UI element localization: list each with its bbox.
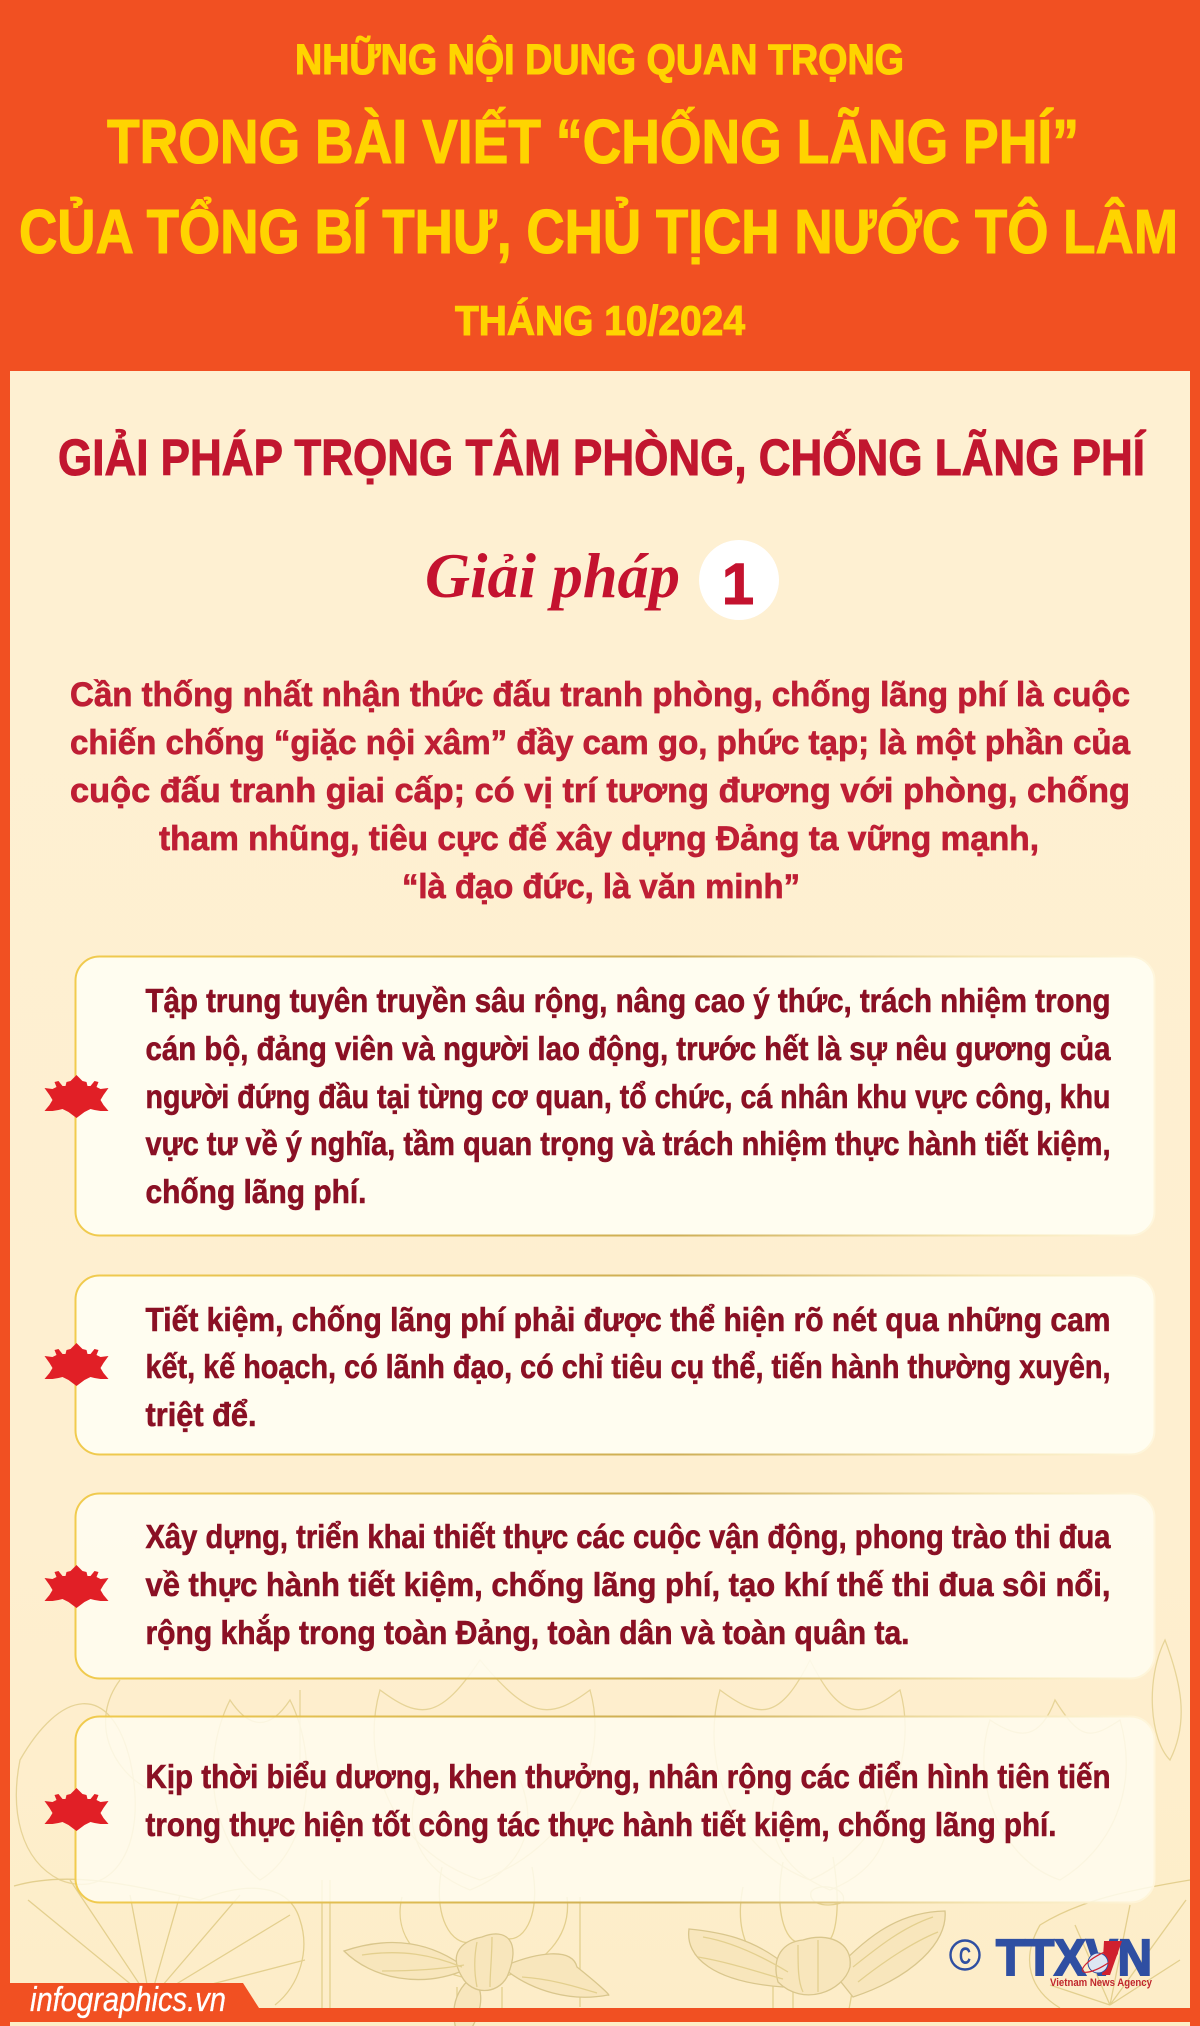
card 1 text: chống lãng phí. [146,1174,366,1211]
copyright mark [950,1940,980,1970]
lotus flower centre [344,1867,609,2026]
panel: header [0,0,1200,371]
card 3 text [146,1519,1111,1652]
card 4 text: trong thực hiện tốt công tác thực hành tiết kiệm, chống lãng phí. [146,1807,1056,1844]
logo: TTXVN copyright [950,1929,1153,1989]
title line 1: NHỮNG NỘI DUNG QUAN TRỌNG [295,35,904,84]
footer tab [0,1981,259,2022]
card 2 text: Tiết kiệm, chống lãng phí phải được thể hiện rõ nét qua những cam [146,1302,1110,1339]
globe emblem [1080,1941,1122,1976]
icon: lotus 1 [44,1075,108,1118]
intro text block: chiến chống “giặc nội xâm” đầy cam go, phức tạp; là một phần của [70,724,1131,762]
intro text block: Cần thống nhất nhận thức đấu tranh phòng, chống lãng phí là cuộc [70,676,1130,714]
background: lotus line art [14,1640,1190,2026]
panel: card 2 [44,1276,1154,1454]
number badge: 1 [722,552,754,617]
lotus flower right [689,1857,945,2017]
solution label: Giải pháp [425,540,680,611]
card 1 text [146,983,1111,1211]
panel: card 1 [44,956,1154,1236]
lotus leaf right [1030,1880,1190,2008]
icon: lotus 3 [44,1565,108,1608]
agency tagline: Vietnam News Agency [1050,1977,1153,1989]
icon: lotus 2 [44,1343,108,1386]
copyright mark: C [959,1943,971,1970]
intro text block: tham nhũng, tiêu cực để xây dựng Đảng ta vững mạnh, [159,820,1039,858]
intro text block [70,676,1131,906]
card 2 text: triệt để. [146,1397,256,1434]
intro text block: “là đạo đức, là văn minh” [402,868,800,906]
card 3 text: rộng khắp trong toàn Đảng, toàn dân và toàn quân ta. [146,1614,910,1652]
icon: lotus 4 [44,1788,108,1831]
number badge [699,540,779,620]
panel: card 4 [44,1716,1154,1902]
intro text block: cuộc đấu tranh giai cấp; có vị trí tương đương với phòng, chống [70,772,1130,810]
title line 2: TRONG BÀI VIẾT “CHỐNG LÃNG PHÍ” [107,108,1079,177]
solution label [425,540,779,620]
card 3 text: về thực hành tiết kiệm, chống lãng phí, tạo khí thế thi đua sôi nổi, [146,1567,1110,1604]
card 4 text [146,1759,1110,1844]
title date: THÁNG 10/2024 [455,297,746,344]
lotus leaf left [14,1879,330,2008]
agency wordmark: TTXVN [996,1929,1152,1986]
panel: card 3 [44,1494,1154,1678]
footer source text: infographics.vn [30,1981,226,2019]
card 2 text [146,1302,1110,1434]
